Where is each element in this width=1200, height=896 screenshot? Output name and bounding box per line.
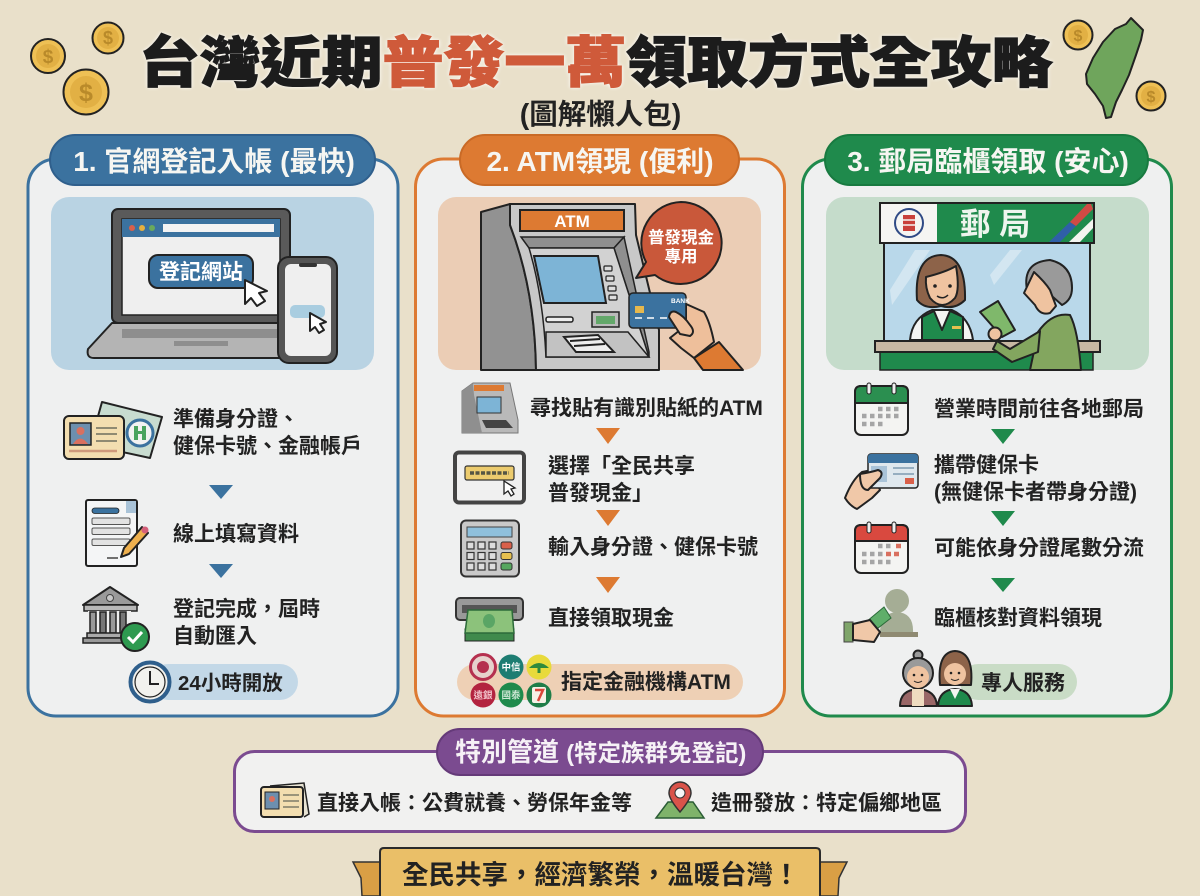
badge: designated banks: [457, 654, 743, 708]
step: go to post office: 營業時間前往各地郵局: [934, 397, 1144, 421]
arrow: [991, 578, 1015, 592]
step: bring card: (無健保卡者帶身分證): [934, 480, 1137, 504]
icon: map pin: [656, 782, 704, 818]
icon: bank logos: 中信: [501, 662, 521, 674]
arrow: [596, 428, 620, 444]
heading: method 1: 1. 官網登記入帳 (最快): [73, 146, 355, 177]
illustration: ATM machine: 普發現金: [648, 227, 714, 247]
step: verify and collect: 臨櫃核對資料領現: [934, 606, 1102, 630]
icon: green calendar: [855, 383, 908, 435]
arrow: [991, 429, 1015, 444]
panel: official website: [28, 135, 398, 716]
item: roster distribution: 造冊發放：特定偏鄉地區: [711, 791, 942, 815]
step: choose option: 普發現金」: [548, 481, 653, 505]
step: registration complete: [83, 587, 320, 651]
icon: form and pencil: [86, 500, 148, 566]
step: collect cash: [456, 598, 674, 641]
badge: designated banks: 指定金融機構ATM: [561, 670, 731, 694]
step: registration complete: 自動匯入: [173, 625, 257, 648]
step: find ATM: [462, 383, 763, 433]
icon: coins left: [31, 22, 124, 114]
icon: bank logos: 國泰: [501, 690, 521, 702]
panel: special channels: [234, 729, 966, 832]
step: bring card: 攜帶健保卡: [934, 454, 1039, 477]
icon: ID card: [261, 783, 309, 817]
counter: [880, 352, 1093, 370]
step: collect cash: 直接領取現金: [548, 606, 674, 630]
icon: bank with check: [83, 587, 149, 651]
icon: ID cards: [64, 402, 162, 459]
customer: [980, 260, 1081, 370]
step: prepare documents: [64, 402, 362, 459]
icon: cash slot: [456, 598, 523, 641]
illustration: post office counter: [826, 197, 1149, 370]
heading: method 3: [825, 135, 1148, 185]
icon: touch screen: [455, 452, 524, 502]
heading: method 1: [50, 135, 375, 185]
title: 台灣近期普發一萬領取方式全攻略: [139, 32, 1053, 94]
step: ID number schedule: 可能依身分證尾數分流: [934, 536, 1144, 560]
icon: coins and Taiwan map: $: [1074, 28, 1083, 45]
badge: open 24 hours: 24小時開放: [178, 672, 283, 695]
icon: cash handover: [844, 589, 918, 642]
item: direct deposit: [261, 783, 632, 817]
step: prepare documents: 健保卡號、金融帳戶: [173, 434, 362, 458]
arrow: [209, 485, 233, 499]
banner: closing slogan: [353, 848, 847, 896]
step: fill in online: [86, 500, 299, 566]
arrow: [596, 510, 620, 526]
step: verify and collect: [844, 589, 1102, 642]
illustration: ATM machine: [438, 197, 761, 370]
illustration: ATM machine: BANK: [671, 298, 690, 305]
panel: ATM: [416, 135, 784, 716]
step: prepare documents: 準備身分證、: [173, 407, 299, 431]
step: go to post office: [855, 383, 1144, 435]
heading: special channels: [437, 729, 763, 775]
illustration: laptop and phone: [51, 197, 374, 370]
subtitle: (圖解懶人包): [520, 99, 681, 131]
heading: method 2: 2. ATM領現 (便利): [486, 146, 714, 177]
icon: elder and clerk: [900, 650, 972, 706]
panel: post office: [802, 135, 1172, 716]
step: choose option: [455, 452, 695, 505]
icon: coins and Taiwan map: [1064, 18, 1166, 118]
icon: small ATM: [462, 383, 518, 433]
step: ID number schedule: [855, 522, 1144, 573]
step: registration complete: 登記完成，屆時: [173, 597, 320, 621]
icon: coins and Taiwan map: $: [1147, 89, 1156, 106]
heading: special channels: 特別管道 (特定族群免登記): [455, 737, 746, 767]
illustration: ATM machine: 專用: [664, 247, 698, 266]
badge: dedicated service: 專人服務: [981, 672, 1065, 695]
heading: method 2: [460, 135, 739, 185]
item: direct deposit: 直接入帳：公費就養、勞保年金等: [317, 791, 632, 815]
illustration: ATM machine: ATM: [554, 212, 590, 231]
icon: red calendar: [855, 522, 908, 573]
step: choose option: 選擇「全民共享: [548, 455, 695, 478]
step: enter ID: 輸入身分證、健保卡號: [548, 535, 758, 559]
clerk: [910, 255, 973, 340]
step: bring card: [845, 454, 1137, 509]
step: enter ID: [461, 520, 758, 576]
icon: hand with card: [845, 454, 918, 509]
banner: closing slogan: 全民共享，經濟繁榮，溫暖台灣！: [402, 860, 800, 890]
item: roster distribution: [656, 782, 942, 818]
arrow: [209, 564, 233, 578]
icon: keypad: [461, 520, 519, 576]
icon: coins left: $: [79, 79, 93, 107]
icon: bank logos: [470, 654, 552, 708]
badge: open 24 hours: [130, 662, 298, 702]
illustration: post office counter: 郵 局: [960, 207, 1030, 242]
icon: bank logos: 遠銀: [473, 690, 493, 702]
arrow: [596, 577, 620, 593]
arrow: [991, 511, 1015, 526]
icon: coins left: $: [43, 47, 54, 68]
heading: method 3: 3. 郵局臨櫃領取 (安心): [847, 146, 1129, 177]
illustration: laptop and phone: 登記網站: [159, 261, 243, 284]
step: fill in online: 線上填寫資料: [173, 522, 299, 546]
step: find ATM: 尋找貼有識別貼紙的ATM: [530, 397, 763, 420]
badge: dedicated service: [900, 650, 1077, 706]
icon: coins left: $: [103, 28, 113, 48]
